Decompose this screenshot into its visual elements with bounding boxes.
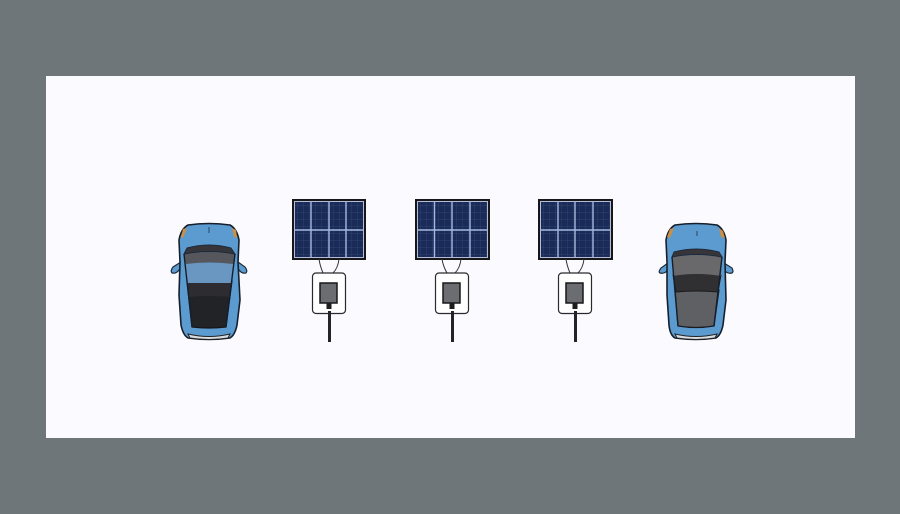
- right car grey roof: [672, 255, 722, 276]
- connector 1: [326, 303, 332, 309]
- wires 3: [566, 259, 584, 273]
- right car hood line: [696, 231, 698, 236]
- left car mirrors: [171, 262, 247, 273]
- solar panel 1: [293, 200, 365, 259]
- wires 1: [319, 259, 339, 273]
- left car pillars: [184, 254, 235, 327]
- solar panel 3: [539, 200, 612, 259]
- left car window: [186, 263, 233, 283]
- solar unit 2: [416, 200, 489, 342]
- left car rear glass: [187, 280, 232, 297]
- right car mirrors: [659, 263, 733, 273]
- inverter 3: [566, 283, 583, 303]
- wires 2: [442, 259, 461, 273]
- icon: left car: [171, 224, 247, 340]
- cable 3: [574, 311, 577, 342]
- right car rear bumper: [675, 334, 717, 340]
- right car headlights: [667, 228, 674, 238]
- left car rear bumper: [188, 334, 230, 340]
- left car windshield: [184, 245, 235, 254]
- inverter box 3: [558, 273, 592, 314]
- right car body: [666, 224, 726, 340]
- cable 2: [451, 311, 454, 342]
- cable 1: [328, 311, 331, 342]
- connector 2: [450, 303, 454, 309]
- left car headlights: [181, 228, 187, 238]
- inverter 1: [320, 283, 337, 303]
- right car rear glass: [675, 290, 719, 328]
- inverter 2: [443, 283, 460, 303]
- left car rear section: [187, 281, 232, 328]
- inverter box 1: [312, 273, 346, 314]
- connector 3: [572, 303, 578, 309]
- solar unit 1: [293, 200, 365, 342]
- solar unit 3: [539, 200, 612, 342]
- left car grey band: [184, 252, 235, 264]
- left car hood line: [208, 227, 210, 233]
- inverter box 2: [436, 273, 468, 314]
- right car windshield: [672, 249, 722, 257]
- solar panel 2: [416, 200, 489, 259]
- icon: right car: [659, 224, 733, 340]
- right car pillars: [672, 257, 722, 326]
- right car dark band: [673, 274, 721, 292]
- left car body: [179, 224, 240, 340]
- panel: white canvas: [46, 76, 855, 438]
